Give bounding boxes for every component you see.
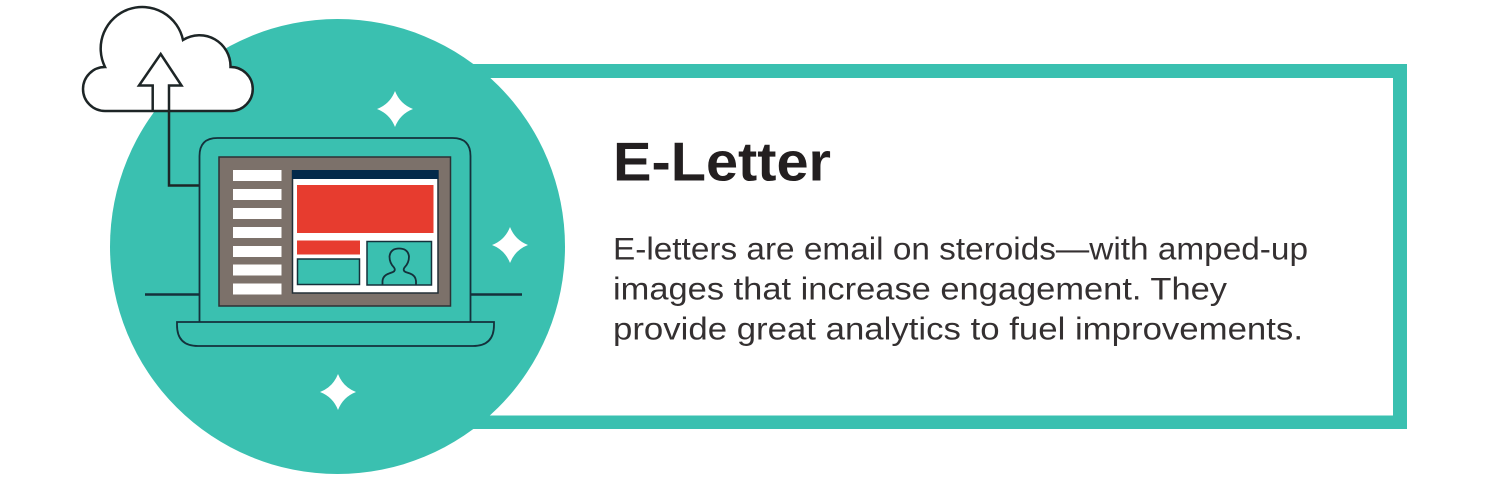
screen <box>219 157 450 306</box>
small red block <box>297 240 360 254</box>
profile photo <box>367 242 432 285</box>
icon: sparkles <box>320 91 528 410</box>
cloud outline <box>83 7 253 111</box>
laptop base <box>177 322 494 346</box>
hero image <box>297 185 434 233</box>
body text: E-letters are email on steroids—with amped-up <box>613 230 1308 266</box>
title bar <box>292 170 438 179</box>
teal circle <box>110 19 565 474</box>
teal block <box>298 259 360 284</box>
icon: laptop <box>177 138 494 346</box>
laptop lid <box>200 138 470 322</box>
ground lines <box>145 293 522 296</box>
browser window <box>292 170 438 293</box>
teal frame panel <box>450 64 1407 429</box>
arrow <box>139 54 200 186</box>
body text <box>613 230 1308 346</box>
body text: images that increase engagement. They <box>613 270 1227 306</box>
heading: E-Letter <box>613 130 831 192</box>
body text: provide great analytics to fuel improvements. <box>613 310 1303 346</box>
sidebar menu <box>233 170 282 294</box>
icon: cloud with upload arrow <box>83 7 253 185</box>
